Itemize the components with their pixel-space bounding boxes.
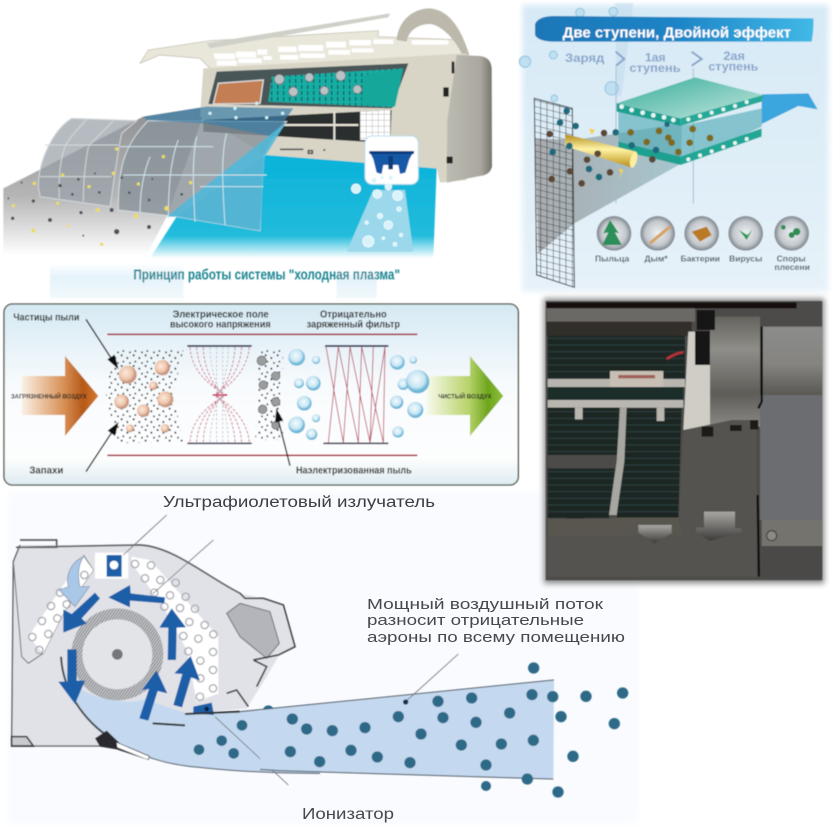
module spheres — [274, 71, 362, 96]
scheme labels: высокого напряжения — [170, 320, 271, 331]
dust particles — [114, 360, 173, 433]
leader line — [407, 654, 458, 701]
caption: Принцип работы системы "холодная плазма" — [133, 267, 400, 283]
outlet flap — [95, 731, 150, 760]
sticker print — [618, 375, 655, 378]
top cover — [16, 540, 240, 593]
lower grille slot — [203, 110, 392, 143]
leader lines — [123, 515, 288, 785]
housing body — [12, 545, 295, 746]
scheme labels: Наэлектризованная пыль — [296, 466, 412, 477]
contaminant icons — [597, 216, 809, 251]
air plume with ions — [240, 654, 628, 798]
contaminant labels: Дым* — [644, 255, 669, 264]
unit cross-section — [12, 515, 320, 785]
top edge — [547, 302, 797, 308]
interior dark cavity — [208, 63, 408, 108]
charged dots field — [255, 350, 283, 440]
contaminant labels: Пыльца — [595, 255, 630, 264]
unit body — [200, 53, 467, 183]
translucent column — [615, 3, 633, 97]
label: powerful air flow: аэроны по всему помещению — [367, 629, 625, 646]
step headings: ступень — [708, 59, 759, 73]
ions in channel — [194, 705, 274, 759]
flow arrows — [58, 585, 214, 721]
grey polluted air floor — [3, 107, 207, 255]
pointer arrows — [86, 319, 290, 472]
panel: electrostatic filtration scheme — [4, 304, 518, 485]
front grille outline — [227, 593, 295, 707]
grey air beam — [535, 123, 682, 253]
tabs — [575, 408, 664, 421]
red field lines — [107, 334, 417, 455]
faint reflection right — [337, 268, 377, 298]
panel: dark photo of indoor unit — [544, 298, 824, 584]
scheme labels: Запахи — [29, 466, 63, 477]
clean air arrow — [427, 356, 503, 436]
upper band — [547, 308, 695, 322]
particles — [7, 172, 183, 237]
right middle panel — [760, 395, 822, 520]
step headings: ступень — [629, 61, 681, 75]
label: ionizer: Ионизатор — [302, 806, 394, 823]
panel: airflow cross-section — [12, 494, 628, 823]
red wire — [667, 352, 683, 359]
side housing — [710, 317, 760, 427]
black latch — [695, 310, 715, 365]
contaminant labels: Бактерии — [681, 255, 720, 264]
contaminant labels — [595, 255, 810, 272]
step headings: 2ая — [723, 49, 745, 63]
contaminant labels: Вирусы — [729, 255, 763, 264]
bubble stream — [347, 190, 413, 252]
ionizer callout — [365, 136, 418, 184]
middle plate — [618, 108, 762, 163]
scheme labels: заряженный фильтр — [307, 319, 400, 331]
channel lower edge — [117, 743, 320, 773]
clean air arrow: ЧИСТЫЙ ВОЗДУХ — [438, 391, 492, 400]
lower fins — [548, 408, 682, 518]
high voltage field — [187, 346, 252, 443]
right lower panel — [762, 520, 822, 546]
label: powerful air flow: Мощный воздушный поток — [367, 596, 604, 613]
charged dust — [257, 356, 280, 429]
left filter — [38, 118, 137, 207]
frame — [4, 304, 518, 485]
sticker — [610, 371, 663, 389]
panel: cold plasma air conditioner — [3, 8, 492, 298]
bubbles — [351, 175, 403, 247]
pale column — [609, 408, 627, 515]
bubbles after filter — [390, 355, 429, 438]
motor — [227, 603, 279, 658]
panel background — [522, 5, 828, 292]
air channel — [65, 672, 320, 773]
left filter ribs — [40, 119, 118, 202]
water drops — [519, 7, 618, 102]
scheme labels: Электрическое поле — [173, 310, 269, 321]
photo shadow — [544, 298, 824, 584]
open lid — [140, 8, 469, 72]
right end cap — [447, 55, 492, 183]
contaminant labels: плесени — [774, 263, 810, 272]
white post — [683, 332, 710, 430]
panel: two stages double effect — [519, 3, 828, 292]
ions — [285, 662, 628, 798]
right upper panel — [762, 327, 822, 395]
white filter right — [132, 557, 218, 702]
left filter shape — [13, 555, 93, 663]
label: powerful air flow — [367, 596, 625, 646]
particles — [546, 108, 713, 187]
blue clean air floor — [150, 155, 437, 258]
teal plasma module — [268, 68, 403, 107]
photo base — [546, 301, 822, 580]
UV lamp — [95, 553, 128, 579]
polluted air arrow: ЗАГРЯЗНЕННЫЙ ВОЗДУХ — [11, 392, 87, 401]
lower body edge — [12, 737, 33, 746]
top plate — [617, 77, 763, 126]
white filter left — [28, 557, 93, 653]
hinge — [702, 420, 758, 437]
label: powerful air flow: разносит отрицательные — [367, 612, 584, 629]
dust dots field — [106, 350, 183, 443]
gold ionizing rod — [565, 128, 639, 180]
mesh filter — [534, 98, 574, 287]
bubbles before filter — [288, 349, 321, 440]
air beam — [143, 107, 293, 137]
charged filter — [323, 346, 388, 443]
scheme labels: Частицы пыли — [13, 312, 79, 323]
step headings: Заряд — [565, 51, 605, 65]
step headings: 1ая — [645, 50, 666, 64]
fan scroll — [61, 657, 117, 742]
fan — [71, 608, 163, 700]
polluted air arrow — [11, 356, 98, 436]
bottom plate — [618, 128, 762, 165]
step dividers — [616, 67, 693, 203]
right filter — [118, 121, 287, 231]
heat exchanger fins upper — [548, 336, 685, 379]
title banner — [535, 16, 813, 42]
title banner: Две ступени, Двойной эффект — [563, 24, 791, 41]
lower housing — [548, 420, 757, 577]
ionizer dot and strips — [153, 712, 240, 725]
step headings — [565, 49, 759, 75]
housing outline — [12, 545, 100, 746]
arrow tabs — [638, 512, 742, 543]
seam — [758, 327, 762, 577]
dust filter orange — [213, 80, 263, 104]
scheme labels — [13, 310, 412, 477]
screw — [767, 531, 777, 541]
plume — [260, 680, 554, 779]
filter holes — [29, 560, 217, 700]
contaminant labels: Споры — [777, 255, 806, 264]
filter grid lines — [120, 133, 267, 225]
diagram backdrop — [8, 492, 638, 824]
flow arrow pale — [59, 557, 89, 607]
control strip — [280, 149, 325, 153]
label: UV emitter: Ультрафиолетовый излучатель — [163, 494, 435, 511]
blue outlet arrow — [762, 93, 818, 124]
white bars — [548, 379, 685, 408]
scheme labels: Отрицательно — [320, 310, 387, 321]
clean side of filter — [167, 122, 287, 231]
lower panel — [548, 518, 683, 535]
faint reflection — [50, 263, 183, 298]
